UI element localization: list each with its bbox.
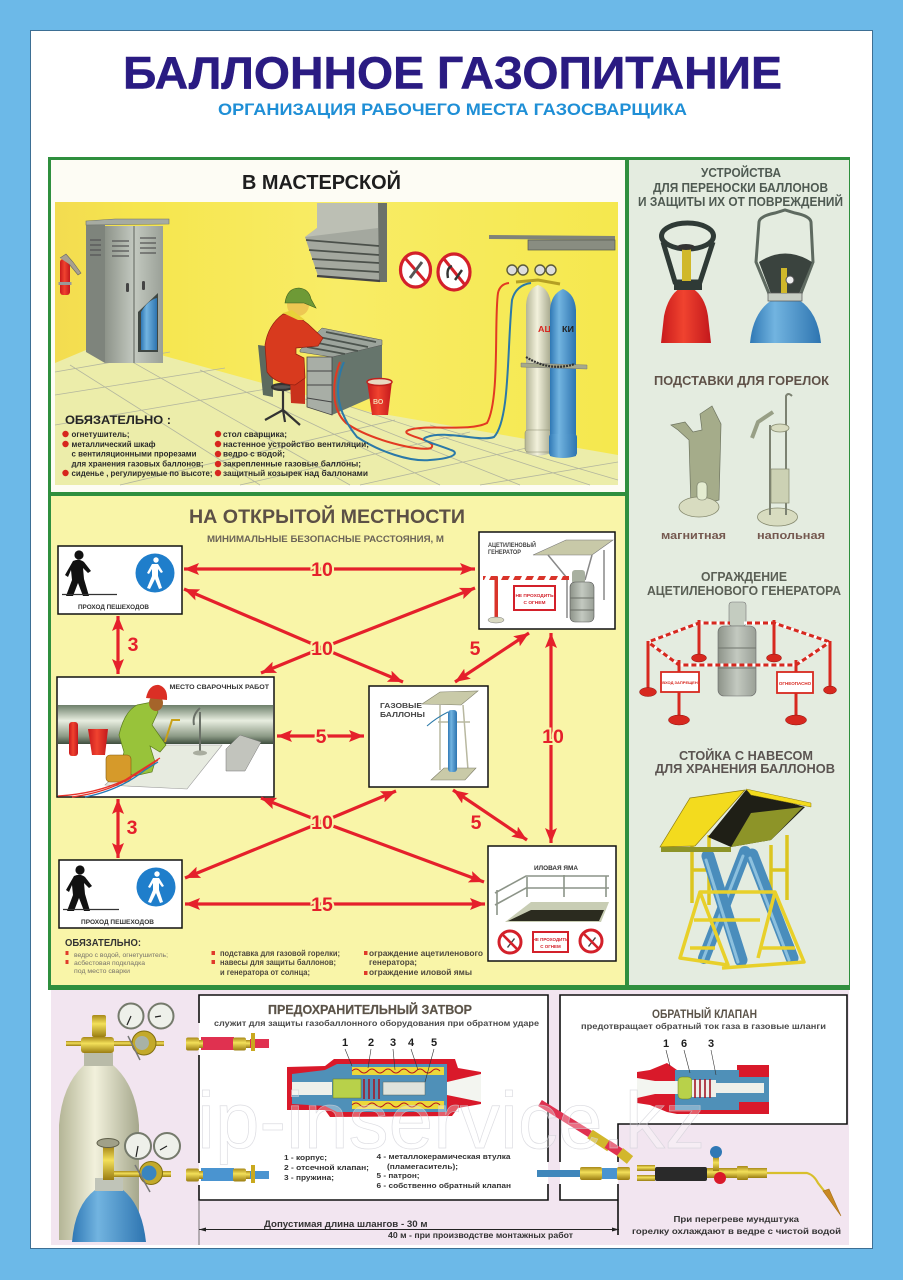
distance numbers: 5: [471, 812, 482, 834]
stem: [103, 1147, 114, 1180]
pipeline: [58, 705, 273, 744]
dimension line: [199, 1228, 619, 1230]
sign: no open flame: [438, 254, 470, 290]
parts legend: 3 - пружина;: [284, 1173, 334, 1182]
gas cylinders with chain: [507, 265, 587, 458]
description: служит для защиты газобаллонного оборудования при обратном ударе: [214, 1018, 539, 1028]
column 2: навесы для защиты баллонов;: [220, 958, 336, 967]
column 3: [369, 949, 483, 977]
column 1: [74, 951, 168, 975]
column 2: [220, 949, 340, 977]
bucket: [88, 729, 108, 755]
cylinder: blue: [72, 1178, 146, 1242]
text: allowed length: Допустимая длина шлангов - 30 м: [264, 1219, 428, 1229]
box: pedestrian passage bottom: [59, 860, 182, 928]
column 3: ограждение ацетиленового: [369, 949, 483, 958]
welder: [119, 702, 166, 776]
red cylinder with guard: [661, 223, 714, 343]
parts legend: (пламегаситель);: [387, 1162, 458, 1171]
side tube: [114, 1171, 171, 1177]
label: magnetic: магнитная: [661, 530, 726, 542]
box: pedestrian passage top: [58, 546, 182, 614]
chair back: [258, 345, 273, 397]
oxygen cylinder: [549, 289, 577, 458]
handwheel: [97, 1138, 119, 1148]
panel: right devices column: [629, 160, 849, 985]
box: welding site: [57, 677, 274, 797]
label: ПРОХОД ПЕШЕХОДОВ: [81, 919, 154, 926]
distance numbers: 5: [316, 726, 327, 748]
canopy left yellow plate: [660, 790, 745, 847]
arrow: lower diagonal to pit: [322, 822, 484, 882]
parts legend: [284, 1152, 511, 1190]
box: sludge pit: НЕ ПРОХОДИТЬ: [533, 937, 569, 942]
box: acetylene generator: С ОГНЕМ: [524, 600, 545, 606]
list text: сиденье , регулируемые по высоте;: [72, 468, 212, 478]
sign: no smoking: [400, 253, 430, 287]
sign: no smoking: [580, 930, 602, 952]
hose length dimension: [199, 1200, 619, 1245]
label: ПРОХОД ПЕШЕХОДОВ: [78, 604, 149, 611]
canopy: [422, 691, 478, 705]
part numbers: 4: [408, 1037, 415, 1049]
panel: in the workshop: [51, 160, 625, 492]
no-smoking signs: [400, 253, 470, 290]
heading: canopy rack: [655, 748, 835, 776]
box: safety valve: [199, 995, 548, 1200]
box: sludge pit: С ОГНЕМ: [540, 944, 561, 949]
column 3: генератора;: [369, 958, 417, 967]
panel: outdoors: [51, 496, 625, 985]
rear frame: [692, 835, 787, 905]
icon: blue pedestrian sign: [136, 554, 174, 592]
floor stand: [752, 394, 798, 526]
heading: outdoors: НА ОТКРЫТОЙ МЕСТНОСТИ: [189, 504, 465, 528]
barrier bar: [483, 576, 569, 580]
distance numbers: [127, 559, 564, 916]
subheading: minimum distances: МИНИМАЛЬНЫЕ БЕЗОПАСНЫЕ РАССТОЯНИЯ, М: [207, 534, 444, 545]
description: предотвращает обратный ток газа в газовые шланги: [581, 1021, 826, 1031]
arrow: lower diagonal to pedestrian: [185, 822, 322, 878]
arrow: lower diagonal to cylinders: [322, 791, 396, 822]
distance numbers: 5: [470, 638, 481, 660]
wall: [55, 202, 618, 485]
subtitle: ОРГАНИЗАЦИЯ РАБОЧЕГО МЕСТА ГАЗОСВАРЩИКА: [218, 100, 687, 119]
list heading: ОБЯЗАТЕЛЬНО:: [65, 938, 141, 949]
part numbers: 3: [708, 1038, 714, 1050]
cylinder: white: [59, 1053, 139, 1240]
pit: [505, 902, 609, 922]
regulator body: [140, 1162, 162, 1184]
burner stand: [194, 708, 200, 752]
front frame: [680, 892, 804, 968]
valve cap: [92, 1015, 106, 1037]
part numbers: 5: [431, 1037, 437, 1049]
text: installation length: 40 м - при производстве монтажных работ: [388, 1230, 573, 1240]
warning sign: [533, 932, 568, 952]
warning sign: [514, 586, 555, 610]
red connector: [186, 1033, 269, 1051]
part numbers: 1: [342, 1037, 348, 1049]
list text: с вентиляционными прорезами: [72, 448, 196, 458]
bullets: [62, 431, 221, 476]
distance numbers: 3: [127, 817, 138, 839]
blue hose and fittings: [537, 1167, 630, 1180]
list text: настенное устройство вентиляции;: [223, 439, 369, 449]
acetylene cylinder: АЦ: [538, 325, 551, 334]
distance numbers: 15: [311, 894, 333, 916]
arrow: upper diagonal to pedestrian: [184, 589, 322, 648]
box: gas cylinders: [369, 686, 488, 787]
arrow: 10 vertical: [549, 633, 553, 843]
label: МЕСТО СВАРОЧНЫХ РАБОТ: [170, 684, 270, 691]
ventilation hood: [305, 203, 387, 282]
arrow: lower diagonal to welding: [261, 798, 322, 822]
generator: [572, 570, 585, 584]
distance arrows: [118, 569, 551, 904]
torch mouthpiece: [767, 1173, 825, 1192]
cap: [285, 288, 316, 308]
label: ГАЗОВЫЕ: [380, 701, 422, 710]
arrow: upper diagonal to generator: [322, 588, 475, 648]
column 3: ограждение иловой ямы: [369, 968, 472, 977]
gas hoses: [334, 283, 531, 460]
red legs: [290, 376, 305, 404]
distance numbers: 10: [542, 726, 564, 748]
stand: [438, 705, 470, 770]
blue connector: [186, 1165, 269, 1183]
parts legend: 6 - собственно обратный клапан: [376, 1181, 511, 1190]
torch: [537, 1103, 841, 1216]
front tape: [648, 642, 830, 665]
part numbers: [663, 1038, 714, 1050]
cooling note: горелку охлаждают в ведре с чистой водой: [632, 1226, 841, 1236]
check valve cross-section: [637, 1063, 769, 1114]
list text: закрепленные газовые баллоны;: [223, 458, 361, 468]
list text: ведро с водой;: [223, 448, 285, 458]
green panel frame: [48, 157, 850, 990]
leader lines: [345, 1049, 434, 1082]
heading: ОБРАТНЫЙ КЛАПАН: [652, 1008, 757, 1021]
heading: ПРЕДОХРАНИТЕЛЬНЫЙ ЗАТВОР: [268, 1002, 472, 1017]
parts legend: 1 - корпус;: [284, 1153, 327, 1162]
generator: [718, 602, 756, 696]
column 1: под место сварки: [74, 968, 130, 975]
heading: generator fence: АЦЕТИЛЕНОВОГО ГЕНЕРАТОРА: [647, 584, 841, 598]
column 1: асбестовая подкладка: [74, 959, 145, 967]
collar: [283, 310, 305, 320]
watermark: ip-inservice.kz: [197, 1076, 705, 1165]
heading: carrying devices: [638, 165, 843, 209]
bullets: [66, 951, 368, 975]
hose: [427, 712, 448, 726]
arrow: top 10: [184, 567, 475, 571]
head: [287, 294, 309, 316]
floor: [55, 350, 618, 485]
regulator top: [66, 1004, 174, 1060]
canopy rack illustration: [660, 789, 811, 968]
wall bracket and chain: [521, 363, 587, 369]
box: gas cylinders: БАЛЛОНЫ: [380, 710, 425, 719]
fire extinguisher: [58, 254, 81, 295]
parts legend: 2 - отсечной клапан;: [284, 1163, 369, 1172]
gauges: [125, 1133, 151, 1159]
column 2: подставка для газовой горелки;: [220, 949, 340, 958]
parts legend: 5 - патрон;: [376, 1171, 420, 1180]
icon: pedestrian: [65, 550, 91, 596]
list text: защитный козырек над баллонами: [223, 468, 368, 478]
list heading: ОБЯЗАТЕЛЬНО :: [65, 415, 171, 427]
label: ИЛОВАЯ ЯМА: [534, 865, 578, 872]
water bucket: ВО: [373, 399, 384, 406]
gauges: [118, 1004, 144, 1028]
arrow: upper diagonal to cylinders: [322, 648, 403, 682]
arrow: upper diagonal to welding: [261, 648, 322, 673]
box: acetylene generator: НЕ ПРОХОДИТЬ: [515, 593, 554, 599]
heading: carrying devices: ДЛЯ ПЕРЕНОСКИ БАЛЛОНОВ: [653, 181, 828, 195]
regulator bottom: [97, 1133, 180, 1192]
list text: огнетушитель;: [72, 429, 130, 439]
generator fence illustration: ВХОД ЗАПРЕЩЕН: [662, 680, 698, 685]
heading: canopy rack: СТОЙКА С НАВЕСОМ: [679, 748, 813, 763]
blue cylinder with guard: [750, 210, 821, 343]
safety valve cross-section: [287, 1059, 481, 1117]
protective shelf over cylinders: [489, 235, 615, 250]
leader lines: [666, 1050, 716, 1075]
oxygen cylinder: КИ: [562, 325, 574, 334]
torch body: [637, 1146, 767, 1184]
red hose and fittings: [540, 1103, 630, 1160]
canopy: [533, 540, 613, 555]
cabinet opening with cylinder: [138, 293, 158, 352]
parts legend: 4 - металлокерамическая втулка: [376, 1152, 511, 1161]
rear tape: [648, 623, 830, 642]
cooling note: При перегреве мундштука: [674, 1214, 799, 1224]
right fence sign: [777, 672, 813, 693]
generator fence illustration: [640, 602, 836, 725]
concrete block: [226, 735, 261, 771]
T-bar: [66, 1041, 164, 1046]
regulator body: [132, 1031, 156, 1055]
list text: [72, 429, 369, 478]
heading: workshop: В МАСТЕРСКОЙ: [242, 170, 401, 194]
outdoor panel background: [51, 496, 625, 985]
welder desk: [300, 328, 382, 415]
list text: стол сварщика;: [223, 429, 287, 439]
part numbers: 6: [681, 1038, 687, 1050]
box fill: [199, 995, 548, 1200]
sign: no flame: [499, 931, 521, 953]
arrow: 3 lower: [116, 799, 120, 858]
heading: generator fence: [647, 570, 841, 598]
box: acetylene generator: [479, 532, 615, 629]
heading: torch stands: ПОДСТАВКИ ДЛЯ ГОРЕЛОК: [654, 374, 829, 388]
heading: carrying devices: И ЗАЩИТЫ ИХ ОТ ПОВРЕЖДЕНИЙ: [638, 194, 843, 209]
arrow: 5 to generator: [455, 633, 529, 682]
box: acetylene generator: ГЕНЕРАТОР: [488, 549, 521, 556]
box: sludge pit: [488, 846, 616, 961]
distance numbers: 10: [311, 812, 333, 834]
part numbers: 3: [390, 1037, 396, 1049]
distance numbers: 10: [311, 638, 333, 660]
cylinder: [448, 710, 457, 772]
mandatory list outdoors: [65, 938, 483, 977]
distance numbers: 3: [128, 634, 139, 656]
canopy right yellow strip: [746, 789, 811, 807]
heading: canopy rack: ДЛЯ ХРАНЕНИЯ БАЛЛОНОВ: [655, 762, 835, 776]
pressure regulators: [507, 265, 560, 284]
list text: для хранения газовых баллонов;: [72, 458, 204, 468]
blue cylinders: [702, 852, 792, 962]
bag: [106, 755, 131, 782]
arrow: 15: [185, 902, 485, 906]
bottom panel background: [51, 990, 849, 1245]
railing: [495, 875, 609, 915]
post: [494, 577, 498, 618]
label: floor: напольная: [757, 530, 825, 542]
red overalls: [265, 314, 323, 385]
label: АЦЕТИЛЕНОВЫЙ: [488, 541, 536, 549]
water bucket: [367, 378, 392, 415]
cooling note: [632, 1214, 841, 1236]
generator fence illustration: ОГНЕОПАСНО: [779, 681, 812, 686]
valve block: [81, 1037, 114, 1053]
arrow: 5 middle: [277, 734, 364, 738]
metal cabinet: [86, 219, 169, 363]
welder figure on stool: [258, 288, 323, 425]
heading: carrying devices: УСТРОЙСТВА: [701, 165, 781, 180]
canopy dark interior: [708, 790, 805, 847]
magnetic stand: [671, 406, 721, 517]
mandatory list workshop: [62, 415, 369, 478]
title: БАЛЛОННОЕ ГАЗОПИТАНИЕ: [123, 48, 782, 98]
box outline with gaps: [199, 995, 548, 1200]
icon: pedestrian: [66, 865, 92, 911]
right panel background: [629, 160, 849, 985]
torch: [165, 720, 180, 742]
box fill: [560, 995, 847, 1200]
arrow: 3 upper: [116, 616, 120, 674]
left fence sign: [661, 672, 699, 692]
heading: generator fence: ОГРАЖДЕНИЕ: [701, 570, 787, 584]
icon: blue pedestrian sign: [136, 868, 176, 906]
list text: металлический шкаф: [72, 439, 156, 449]
posts: [648, 620, 830, 720]
extinguisher: [69, 722, 78, 756]
part numbers: 2: [368, 1037, 374, 1049]
part numbers: 1: [663, 1038, 669, 1050]
arrow: 5 to pit: [453, 790, 527, 840]
ground slab: [105, 745, 222, 789]
distance numbers: 10: [311, 559, 333, 581]
workshop panel background: [51, 160, 625, 492]
panel: bottom hose fittings: [51, 990, 849, 1245]
canopy olive panel: [731, 807, 803, 847]
column 1: ведро с водой, огнетушитель;: [74, 951, 168, 959]
part numbers: [342, 1037, 437, 1049]
stool: [265, 384, 300, 425]
column 2: и генератора от солнца;: [220, 968, 310, 977]
acetylene cylinder: [525, 285, 552, 456]
box: check valve: [560, 995, 847, 1235]
hoses: [58, 758, 160, 797]
box outline with gaps: [560, 995, 847, 1235]
